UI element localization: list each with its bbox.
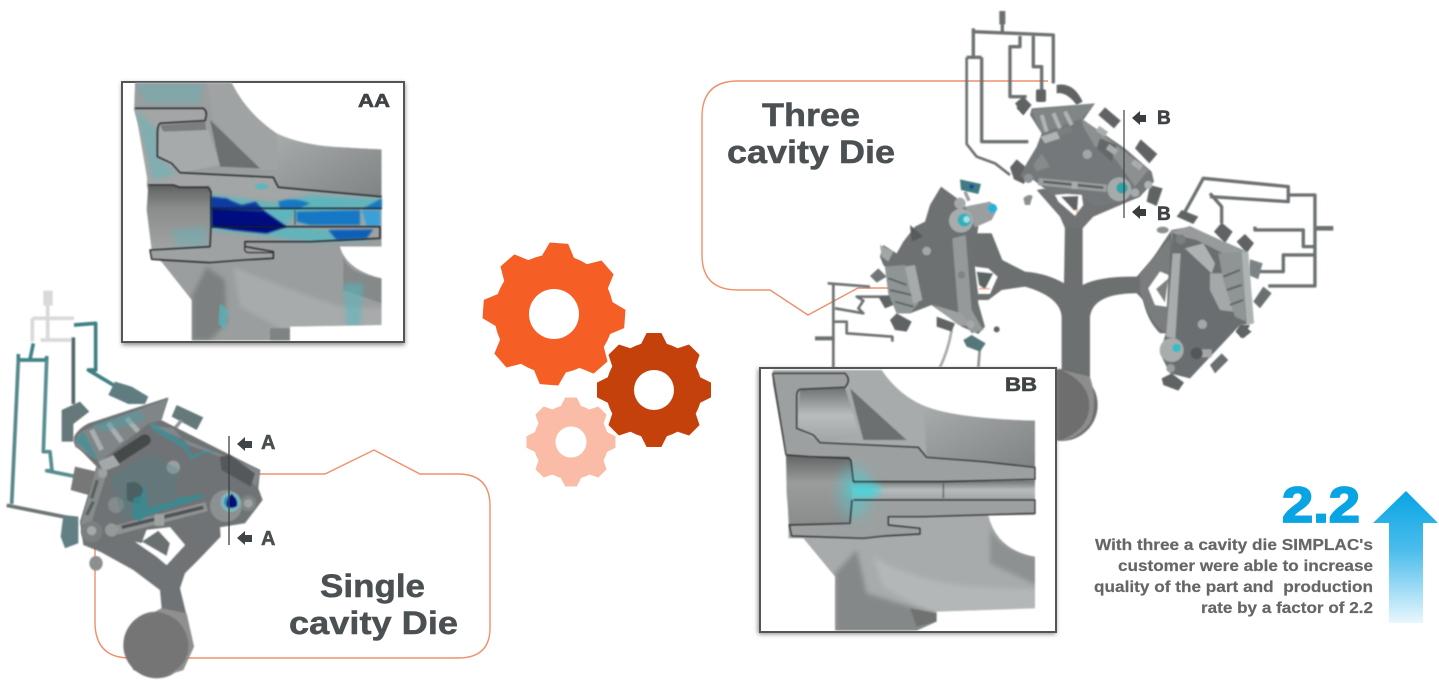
panel shadow [758,369,1056,634]
label: B [1157,108,1171,129]
bore [786,455,852,525]
boss [1107,177,1131,201]
left strip [1166,253,1181,338]
cyan flow front [839,465,871,518]
caption text [1094,537,1373,617]
runners [7,323,115,517]
gates: top and right cavity [1015,85,1272,338]
section line [1123,110,1125,218]
callout outline: three cavity die [702,81,1048,315]
arrow [1132,111,1146,125]
lower flange [789,502,1035,538]
panel shadow [122,83,405,345]
side arm [1140,238,1171,333]
arrow [237,437,252,451]
panel frame [122,82,404,342]
drip [1023,195,1033,205]
biscuit [123,612,190,678]
lower rod [117,507,207,530]
single cavity die casting [7,291,263,678]
runners: top cavity [967,11,1053,175]
caption text: quality of the part and production [1094,579,1373,596]
upper plate [75,398,168,462]
channel [211,208,382,227]
caption text: rate by a factor of 2.2 [1201,600,1373,617]
pale sprue [32,291,74,342]
section render [773,370,1043,637]
blocks [1185,243,1215,273]
cutout [1055,194,1083,216]
fins [1218,252,1246,322]
teal flow marks [132,483,203,522]
right strip [952,235,983,333]
top plate [1032,103,1095,133]
gates [61,382,203,548]
mould body [74,397,263,678]
label: B [1157,204,1171,225]
boss with shrinkage spot [240,495,256,511]
section render [134,83,387,341]
caption text: With three a cavity die SIMPLAC's [1095,537,1373,554]
right plate [1082,118,1148,187]
top cavity [1010,100,1154,216]
gates [1236,325,1250,338]
light teal haze [135,83,382,330]
body [1020,103,1154,207]
label: A [261,432,275,454]
gates [1010,159,1029,184]
section panel BB [758,368,1056,637]
icon: pale gear [526,398,616,486]
biscuit [1026,369,1098,441]
nozzle [965,202,998,227]
heading: Three cavity Die: cavity Die [727,134,895,170]
heading: Three cavity Die [727,97,895,170]
left rib strip [81,467,107,525]
drip [1157,227,1169,233]
section line [228,436,230,545]
section marker A-A [229,432,275,550]
runners [815,283,980,368]
caption text: customer were able to increase [1118,558,1373,575]
label AA: AA [358,91,390,111]
panel frame [760,368,1056,632]
upper flange [135,108,382,208]
heading: Single cavity Die [289,568,458,641]
icon: dark gear [597,333,711,447]
fins [885,265,918,313]
label: A [261,528,275,550]
central bosses [167,461,180,474]
right cavity [1140,226,1254,391]
heading: Three cavity Die: Three [762,97,860,133]
label BB: BB [1005,375,1037,396]
section panel AA [122,82,405,345]
left cavity [815,179,1000,368]
three cavity die casting [815,11,1333,441]
dark blue hot spot [211,197,287,233]
lower flange [150,227,380,263]
heading: Single cavity Die: cavity Die [289,605,458,641]
boss [1166,364,1175,373]
icon: large gear [478,238,630,390]
section marker B-B [1124,108,1171,225]
sprue tree [970,223,1180,377]
body [880,187,985,334]
outlines [135,108,382,263]
runners: right cavity [1185,178,1333,286]
big number 2.2: 2.2 [1282,477,1360,533]
gates [870,268,887,283]
upper flange [773,373,1035,480]
arrow [237,531,252,545]
body [1160,227,1254,378]
channel [853,481,1035,499]
callout outline: single cavity die [95,450,490,658]
heading: Single cavity Die: Single [320,568,425,604]
cutout [135,527,185,565]
icon: upward gradient arrow [1373,491,1438,623]
right plate [148,425,260,487]
top band [1171,226,1245,253]
outlines [773,373,1035,538]
lower strip [1038,182,1107,188]
cutout [975,267,998,294]
arrow [1132,205,1146,219]
mid blue flow [278,198,382,240]
bore [147,185,211,250]
